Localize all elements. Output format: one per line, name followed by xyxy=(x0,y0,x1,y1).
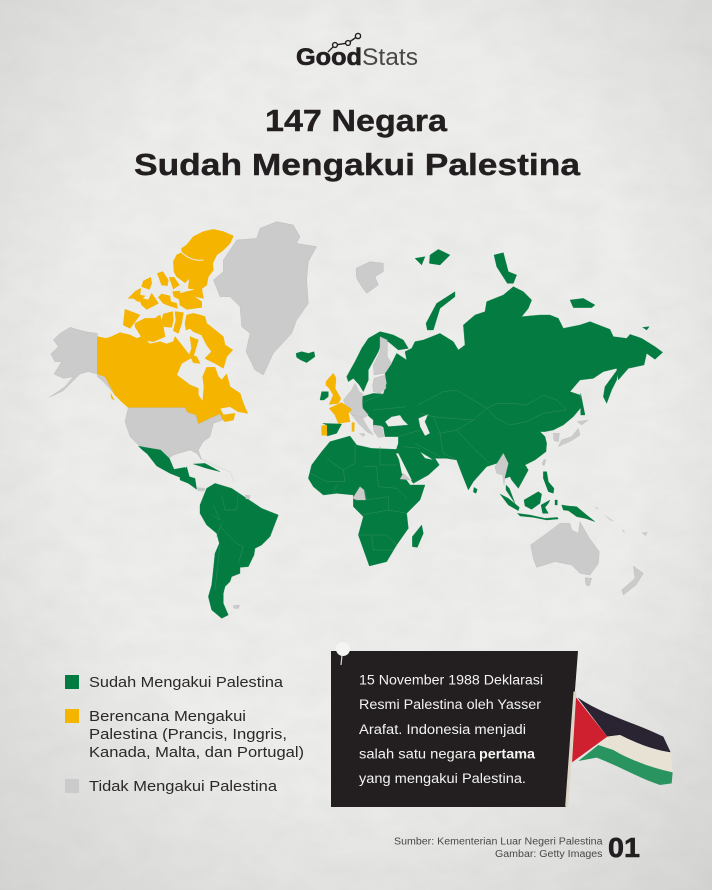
source note: Gambar: Getty Images xyxy=(495,849,602,860)
Papua xyxy=(562,505,595,522)
Alaska xyxy=(49,327,116,397)
Sicily xyxy=(359,433,365,437)
Sakhalin xyxy=(581,393,585,415)
Antilles xyxy=(202,458,234,482)
Malay Peninsula xyxy=(506,485,515,503)
icon: Palestinian flag xyxy=(567,692,673,807)
Greenland xyxy=(213,222,317,375)
Spain xyxy=(323,423,342,436)
logo: GoodStats: Stats xyxy=(362,44,418,71)
Finland xyxy=(373,337,392,375)
French Guiana xyxy=(245,495,250,499)
New Siberian Islands xyxy=(570,298,595,308)
callout text: yang mengakui Palestina. xyxy=(359,771,526,786)
Falkland Islands xyxy=(233,605,239,608)
logo: GoodStats: Good xyxy=(296,44,362,71)
African borders xyxy=(310,445,407,550)
legend: planning to recognise xyxy=(65,708,304,761)
callout text: salah satu negara xyxy=(359,746,477,762)
title: Sudah Mengakui Palestina xyxy=(134,147,581,182)
logo: GoodStats xyxy=(296,33,418,71)
Franz Josef Land xyxy=(415,249,450,265)
legend: planning to recognise: Kanada, Malta, dan Portugal) xyxy=(89,744,304,761)
map: Europe xyxy=(320,332,408,437)
callout text: Resmi Palestina oleh Yasser xyxy=(359,697,542,712)
Africa xyxy=(308,436,425,566)
Cuba xyxy=(193,463,220,472)
page number: 01 xyxy=(608,832,640,863)
Wrangel Island xyxy=(643,327,649,330)
Taiwan xyxy=(542,459,546,466)
Red Sea xyxy=(396,453,412,482)
legend: recognised: Sudah Mengakui Palestina xyxy=(89,674,284,691)
South American borders xyxy=(212,493,243,590)
Iceland xyxy=(296,352,315,363)
title: 147 Negara xyxy=(265,103,448,138)
Ireland xyxy=(320,392,328,400)
Central Europe xyxy=(343,383,368,418)
Norway, Sweden and Kola xyxy=(347,332,408,392)
legend: planning to recognise: Berencana Mengakui xyxy=(89,708,246,725)
Panama xyxy=(197,488,205,491)
Kamchatka xyxy=(603,368,618,403)
Cameroon xyxy=(353,487,366,500)
France xyxy=(329,403,352,423)
map: North America and Greenland xyxy=(49,222,317,477)
Philippines xyxy=(543,472,554,493)
map: southern hemisphere xyxy=(180,436,643,618)
Sri Lanka xyxy=(473,487,477,493)
New Zealand xyxy=(622,566,643,595)
Java and Lesser Sunda xyxy=(517,513,558,520)
Svalbard xyxy=(356,262,383,293)
Portugal xyxy=(322,425,327,435)
South America xyxy=(200,483,278,618)
Sumatra xyxy=(500,494,519,511)
Novaya Zemlya xyxy=(426,292,455,330)
Australia xyxy=(531,522,599,575)
Melanesia islands xyxy=(595,506,648,536)
Asian borders xyxy=(360,390,567,463)
Italy xyxy=(352,415,373,435)
legend: planning to recognise: Palestina (Prancis, Inggris, xyxy=(89,726,287,743)
Baltic states xyxy=(373,375,386,393)
United Kingdom xyxy=(326,373,341,404)
map: Eurasia xyxy=(356,249,663,493)
map: Southeast Asia and East Asia xyxy=(495,420,648,536)
callout text xyxy=(359,672,543,786)
Japan xyxy=(558,420,588,447)
Tasmania xyxy=(585,578,592,586)
icon: pin xyxy=(336,642,350,665)
callout text: 15 November 1988 Deklarasi xyxy=(359,672,543,688)
Eritrea xyxy=(400,473,411,480)
Greece xyxy=(373,425,384,437)
source note: Sumber: Kementerian Luar Negeri Palestina xyxy=(394,836,603,848)
Hainan xyxy=(523,467,527,471)
Canada xyxy=(97,229,248,424)
legend xyxy=(65,674,304,795)
legend: not recognised: Tidak Mengakui Palestina xyxy=(89,778,278,795)
Sulawesi xyxy=(541,500,550,513)
source note xyxy=(394,836,603,860)
callout xyxy=(331,642,578,807)
Central America xyxy=(180,467,197,489)
title xyxy=(134,103,581,182)
Russia, Eastern Europe and Asia xyxy=(362,287,663,490)
South Korea xyxy=(553,433,559,442)
Myanmar xyxy=(495,453,508,485)
world map xyxy=(49,222,663,618)
callout text: pertama xyxy=(479,746,536,762)
Severnaya Zemlya xyxy=(494,253,517,283)
callout text: Arafat. Indonesia menjadi xyxy=(359,722,526,737)
Moluccas xyxy=(555,500,557,505)
Mexico xyxy=(138,446,189,477)
Borneo xyxy=(524,492,542,509)
United States xyxy=(125,408,223,460)
Sardinia and Corsica xyxy=(352,423,354,432)
Madagascar xyxy=(412,525,423,547)
